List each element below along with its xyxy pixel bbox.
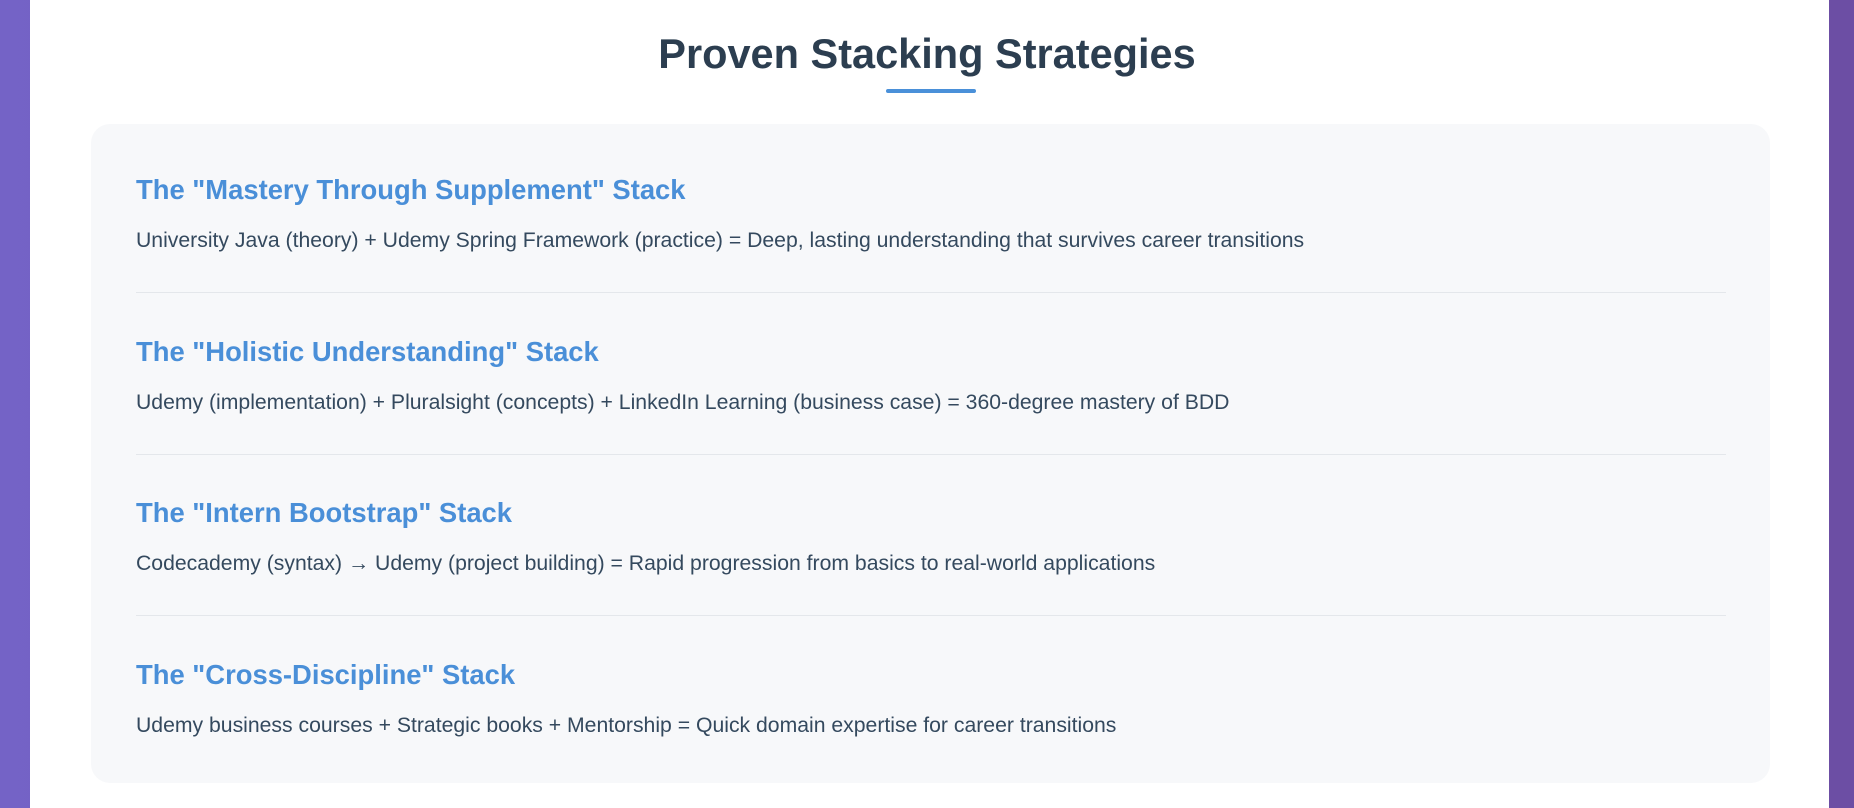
title: Proven Stacking Strategies <box>658 30 1196 77</box>
item: holistic understanding: Udemy (implementation) + Pluralsight (concepts) + LinkedIn Learning (business case) = 360-degree mastery of BDD <box>136 391 1229 414</box>
item: mastery through supplement <box>136 174 1304 252</box>
item: cross-discipline: Udemy business courses + Strategic books + Mentorship = Quick domain expertise for career transitions <box>136 714 1116 737</box>
item: holistic understanding <box>136 336 1229 414</box>
item: intern bootstrap: Codecademy (syntax) → Udemy (project building) = Rapid progression from basics to real-world applications <box>136 552 1155 575</box>
item: mastery through supplement: The "Mastery Through Supplement" Stack <box>136 174 686 205</box>
item: mastery through supplement: University Java (theory) + Udemy Spring Framework (practice) = Deep, lasting understanding that survives career transitions <box>136 229 1304 252</box>
item: cross-discipline <box>136 659 1116 737</box>
panel: stacking strategies <box>91 124 1770 783</box>
item: holistic understanding: The "Holistic Understanding" Stack <box>136 336 599 367</box>
item: intern bootstrap: The "Intern Bootstrap" Stack <box>136 497 512 528</box>
item: cross-discipline: The "Cross-Discipline" Stack <box>136 659 515 690</box>
item: intern bootstrap <box>136 497 1155 575</box>
